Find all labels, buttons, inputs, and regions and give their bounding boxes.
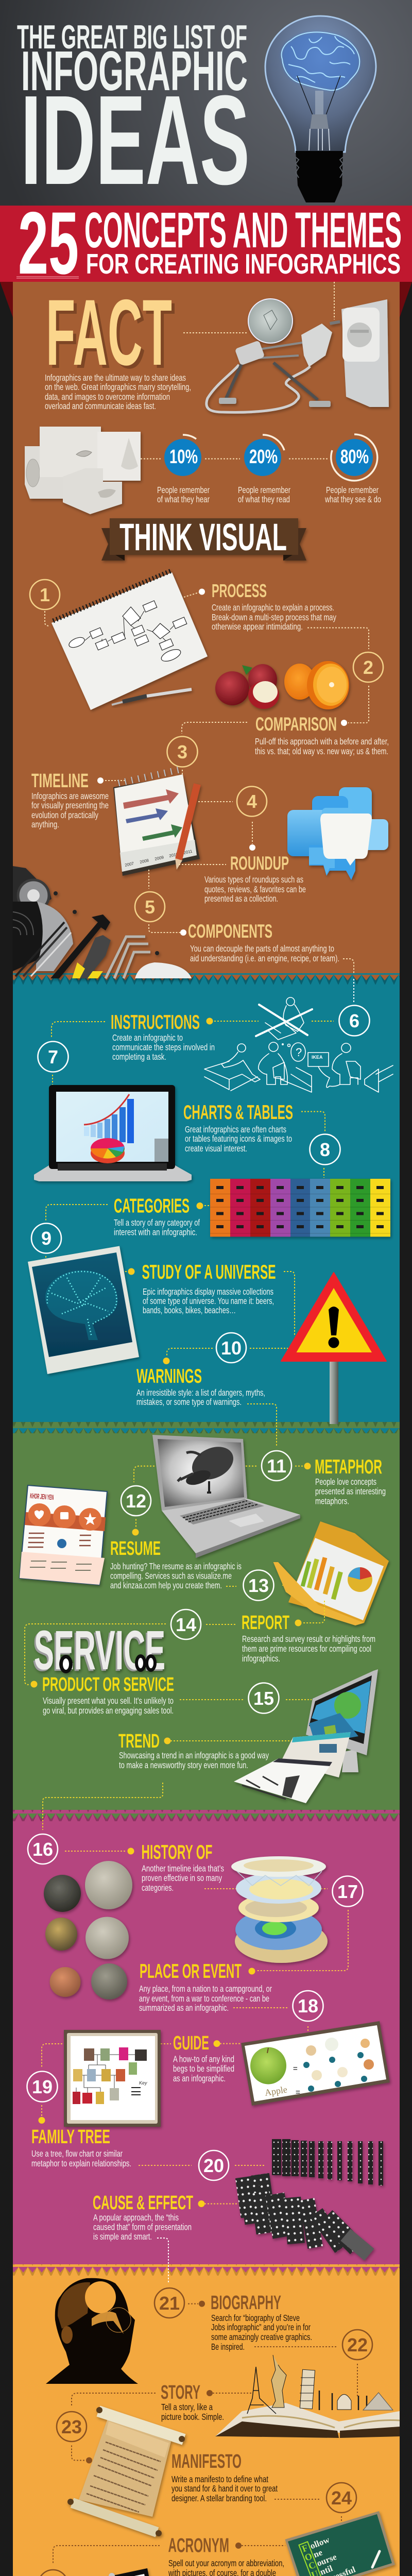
icon: laptop with elephant — [152, 1435, 300, 1558]
dot marker — [249, 844, 255, 851]
number 14 — [171, 1609, 201, 1639]
heading: warnings: WARNINGS — [136, 1365, 202, 1387]
captions: remember stats: of what they read — [238, 494, 290, 504]
number 21: 21 — [159, 2293, 180, 2314]
icon: falling dominoes — [235, 2139, 383, 2261]
number 23 — [57, 2412, 87, 2442]
icon: notebook with flowchart — [52, 571, 208, 710]
connector — [53, 2304, 357, 2576]
number 18 — [293, 1991, 323, 2021]
connector — [46, 1205, 210, 1260]
icon: exploded stadium — [231, 1856, 328, 1963]
text: trend: to make a newsworthy story even more fun. — [119, 1760, 248, 1770]
connector — [343, 959, 354, 973]
text: trend: Showcasing a trend in an infographic is a good way — [119, 1750, 269, 1760]
icon: chalkboard focus acronym: F — [300, 2543, 310, 2554]
number 23: 23 — [61, 2416, 82, 2437]
dot marker — [128, 1848, 134, 1855]
text: timeline: for visually presenting the — [31, 800, 109, 810]
captions: remember stats: People remember — [326, 485, 379, 495]
icon: manifesto scroll — [67, 2407, 185, 2536]
icon: timeline notepad and pencil: 2008 — [140, 858, 149, 865]
underline under 25 — [16, 277, 79, 278]
panel: red banner — [0, 194, 412, 317]
text: guide: as an infographic. — [173, 2073, 226, 2083]
text: instructions: communicate the steps involved in — [112, 1042, 215, 1052]
text: study of a universe — [143, 1286, 274, 1315]
icon: report folder with charts — [273, 1521, 389, 1625]
icon: pen — [112, 689, 192, 705]
connector — [52, 1021, 334, 1084]
dot marker — [164, 1737, 171, 1744]
heading: resume: RESUME — [110, 1538, 161, 1560]
number 6 — [339, 1006, 370, 1036]
text: components: You can decouple the parts of almost anything to — [190, 943, 334, 954]
banner: think visual: THINK VISUAL — [119, 516, 287, 558]
icon: coloured filing cabinets — [210, 1179, 390, 1236]
icon: 3D service truck — [34, 1619, 165, 1681]
panel: magenta section — [27, 1834, 390, 2282]
heading: components: COMPONENTS — [188, 921, 272, 942]
icon: clipboard checklist and red pen — [77, 2568, 167, 2576]
text: metaphor: metaphors. — [315, 1496, 349, 1506]
text: place or event — [139, 1984, 272, 2013]
number 22: 22 — [347, 2334, 368, 2355]
text: charts and tables — [185, 1124, 292, 1154]
text: instructions: completing a task. — [112, 1052, 166, 1062]
icon: timeline notepad and pencil: 2007 — [125, 861, 134, 868]
heading: fact: FACT — [46, 280, 172, 385]
number 2 — [353, 652, 383, 682]
number 9: 9 — [41, 1228, 52, 1249]
heading: history of: HISTORY OF — [141, 1841, 212, 1863]
icon: laptop with chart — [34, 1085, 192, 1181]
text: biography: Be inspired. — [211, 2342, 245, 2352]
text: warnings — [136, 1387, 265, 1407]
text: manifesto: Write a manifesto to define what — [171, 2474, 268, 2484]
text: history of: Another timeline idea that’s — [142, 1863, 224, 1873]
number 11: 11 — [267, 1455, 286, 1477]
dot marker — [198, 2200, 205, 2207]
text: charts and tables: create visual interest. — [185, 1143, 247, 1154]
connector — [157, 2238, 168, 2282]
text: fact paragraph: on the web. Great infographics marry storytelling, — [45, 382, 191, 392]
number 10 — [216, 1333, 246, 1363]
text: charts and tables: Great infographics are often charts — [185, 1124, 286, 1134]
text: cause and effect: A popular approach, the “this — [93, 2212, 179, 2223]
captions: remember stats: People remember — [238, 485, 290, 495]
number 7: 7 — [48, 1046, 58, 1067]
text: process — [212, 602, 336, 632]
connector — [353, 979, 354, 1003]
text: categories: interest with an infographic. — [114, 1227, 197, 1238]
text: process: Create an infographic to explain a process. — [212, 602, 334, 613]
text: instructions: Create an infographic to — [112, 1032, 183, 1043]
text: charts and tables: or tables featuring icons & images to — [185, 1133, 292, 1144]
text: story — [161, 2402, 224, 2422]
icon: resume document: KHOR JEN YEN — [30, 1492, 54, 1501]
title line: infographic: INFOGRAPHIC — [21, 40, 248, 103]
number 24 — [327, 2483, 356, 2513]
text: biography: Search for “biography of Steve — [211, 2313, 300, 2323]
text: metaphor: People love concepts — [315, 1477, 376, 1487]
icon: chalkboard focus acronym: C — [307, 2560, 317, 2571]
connector — [42, 1851, 348, 2204]
text: study of a universe: of some type of universe. You name it: beers, — [143, 1296, 274, 1306]
number 5 — [135, 892, 165, 922]
text: biography: Jobs infographic” and you’re in for — [211, 2322, 311, 2332]
text: biography — [211, 2313, 312, 2352]
icon: landmarks rising from open book — [215, 2355, 400, 2438]
text: components — [190, 943, 339, 963]
text: acronym — [168, 2558, 287, 2576]
dot marker — [163, 1358, 170, 1364]
panel: fact and think visual — [13, 280, 389, 978]
number 8 — [310, 1134, 340, 1164]
icon: face blocks — [25, 427, 141, 514]
heading: charts and tables: CHARTS & TABLES — [183, 1101, 293, 1124]
text: family tree: metaphor to explain relationships. — [31, 2158, 131, 2168]
icon: ikea assembly line drawing: ? — [296, 1046, 302, 1059]
icon: warning sign — [281, 1273, 386, 1424]
icon: family tree frame — [64, 2030, 161, 2127]
heading: manifesto: MANIFESTO — [171, 2451, 242, 2472]
dot marker — [180, 929, 186, 936]
text: manifesto: designer. A stellar branding tool. — [171, 2493, 267, 2503]
number 25 — [38, 2570, 68, 2576]
number 22 — [342, 2330, 372, 2360]
captions: remember stats: of what they hear — [157, 494, 210, 504]
text: process: Break-down a multi-step process that may — [212, 612, 336, 622]
heading: guide: GUIDE — [173, 2032, 209, 2054]
panel: teal section — [28, 979, 393, 1447]
number 24: 24 — [331, 2487, 352, 2509]
heading: instructions: INSTRUCTIONS — [111, 1011, 200, 1033]
text: warnings: mistakes, or some type of warnings. — [136, 1397, 242, 1407]
number 15 — [248, 1683, 279, 1714]
heading: study of a universe: STUDY OF A UNIVERSE — [142, 1261, 276, 1283]
text: categories — [114, 1217, 200, 1238]
text: timeline: Infographics are awesome — [31, 791, 109, 801]
text: guide: begs to be simplified — [173, 2063, 234, 2074]
text: timeline: evolution of practically — [31, 810, 98, 820]
heading: place or event: PLACE OR EVENT — [140, 1960, 242, 1982]
text: process: otherwise appear intimidating. — [212, 621, 303, 632]
stat: 20 percent: 20% — [249, 446, 278, 468]
text: biography: some amazingly creative graphics. — [211, 2332, 312, 2342]
dot marker — [97, 777, 104, 784]
text: place or event: any event, from a war to conference - can be — [139, 1993, 269, 2004]
text: roundup: quotes, reviews, & favorites can be — [204, 884, 306, 894]
heading: story: STORY — [161, 2382, 200, 2403]
icon: polaroid of circuit brain — [28, 1246, 139, 1374]
text: cause and effect: caused that” form of presentation — [93, 2222, 192, 2232]
connector — [125, 1272, 295, 1447]
text: history of: categories. — [142, 1883, 174, 1893]
text: metaphor — [315, 1477, 386, 1506]
icon: apple guide card: Apple — [264, 2084, 288, 2098]
stat: 80 percent: 80% — [340, 446, 369, 468]
connector — [149, 802, 252, 933]
captions: remember stats: People remember — [157, 485, 210, 495]
number 14: 14 — [176, 1614, 196, 1635]
text: history of: proven effective in so many — [142, 1873, 222, 1883]
icon: chalkboard focus acronym: ollow — [308, 2535, 331, 2551]
title line: ideas: IDEAS — [21, 69, 250, 211]
icon: resume document — [20, 1485, 107, 1585]
heading: cause and effect: CAUSE & EFFECT — [93, 2192, 193, 2214]
dot marker — [213, 2040, 220, 2047]
number 9 — [31, 1223, 61, 1253]
text: family tree: Use a tree, flow chart or similar — [31, 2148, 123, 2159]
number 2: 2 — [363, 657, 373, 678]
heading: report: REPORT — [242, 1612, 289, 1634]
dot marker — [206, 1018, 213, 1024]
dot marker — [38, 2117, 45, 2124]
number 19: 19 — [32, 2076, 53, 2097]
heading: roundup: ROUNDUP — [230, 853, 289, 874]
text: resume: Job hunting? The resume as an infographic is — [110, 1561, 242, 1571]
text: categories: Tell a story of any category of — [114, 1217, 200, 1228]
number 12 — [121, 1486, 151, 1516]
connector — [182, 686, 369, 734]
dot marker — [31, 1681, 37, 1688]
icon: family tree frame: Key — [139, 2080, 147, 2086]
text: story: picture book. Simple. — [161, 2412, 224, 2422]
text: components: aid understanding (i.e. an engine, recipe, or team). — [190, 953, 339, 963]
dot marker — [341, 720, 347, 726]
text: trend — [119, 1750, 269, 1770]
number 16: 16 — [32, 1839, 53, 1860]
number 17: 17 — [337, 1881, 358, 1902]
text: place or event: summarized as an infographic. — [139, 2003, 229, 2013]
text: history of — [142, 1863, 224, 1893]
icon: monitor and printed web pages — [234, 1669, 378, 1803]
number 4: 4 — [247, 791, 257, 812]
heading: categories: CATEGORIES — [114, 1195, 190, 1217]
number 10: 10 — [221, 1337, 242, 1359]
panel: orange section — [38, 2278, 400, 2576]
text: story: Tell a story, like a — [161, 2402, 213, 2412]
number 17 — [333, 1876, 363, 1906]
dot marker — [197, 1202, 203, 1209]
icon: timeline notepad and pencil: 2011 — [183, 849, 193, 855]
text: resume: compelling. Services such as visualize.me — [110, 1570, 232, 1581]
number 3 — [167, 737, 198, 767]
dot marker — [132, 1529, 139, 1535]
text: cause and effect — [93, 2212, 192, 2242]
number 12: 12 — [126, 1490, 146, 1512]
number 20 — [199, 2150, 229, 2180]
connector — [25, 1601, 324, 1830]
number 8: 8 — [320, 1139, 330, 1160]
text: study of a universe: bands, books, bikes, beaches… — [143, 1305, 236, 1315]
text: roundup: presented as a collection. — [204, 893, 278, 904]
text: acronym: Spell out your acronym or abbreviation, — [168, 2558, 284, 2568]
stat: 20 percent — [244, 435, 284, 476]
dot marker — [128, 1268, 135, 1275]
icon: tools and bike components — [13, 866, 192, 978]
icon: ikea assembly line drawing — [204, 997, 393, 1092]
text: timeline: anything. — [31, 819, 59, 829]
heading: trend: TREND — [118, 1731, 160, 1752]
number 4 — [237, 786, 267, 816]
number 1 — [30, 580, 60, 609]
text: instructions — [112, 1032, 215, 1062]
dot marker — [295, 1620, 302, 1626]
icon: timeline notepad and pencil — [113, 770, 200, 876]
dot marker — [86, 2458, 92, 2464]
text: fact paragraph: overload and communicate ideas fast. — [45, 401, 156, 411]
number 20: 20 — [203, 2155, 224, 2176]
big number 25: 25 — [18, 194, 79, 293]
panel: green section — [20, 1435, 389, 1830]
number 5: 5 — [145, 896, 155, 918]
number 15: 15 — [253, 1688, 274, 1709]
text: resume — [110, 1561, 242, 1590]
number 16 — [28, 1834, 58, 1864]
number 18: 18 — [298, 1995, 318, 2016]
text: product or service — [43, 1696, 174, 1716]
icon: light bulb with glowing brain — [265, 16, 376, 202]
heading: timeline: TIMELINE — [31, 770, 89, 792]
icon: chalkboard focus acronym: ourse — [315, 2552, 338, 2568]
captions: remember stats — [157, 485, 381, 504]
icon: timeline notepad and pencil: 2010 — [169, 852, 179, 858]
text: manifesto — [171, 2474, 278, 2503]
captions: remember stats: what they see & do — [324, 494, 381, 504]
text: fact paragraph: Infographics are the ultimate way to share ideas — [45, 372, 186, 383]
connector — [134, 1466, 303, 1586]
heading: biography: BIOGRAPHY — [211, 2292, 281, 2314]
text: guide — [173, 2054, 234, 2083]
heading: process: PROCESS — [212, 580, 267, 601]
title line: the great big list of: THE GREAT BIG LIST OF — [17, 18, 247, 56]
dot marker — [207, 2390, 213, 2396]
dot marker — [304, 1463, 311, 1469]
text: product or service: go viral, but provides an engaging sales tool. — [43, 1705, 174, 1716]
number 21 — [154, 2288, 184, 2318]
icon: apple guide card: = — [293, 2064, 298, 2073]
number 13 — [243, 1570, 274, 1600]
text: place or event: Any place, from a nation to a campground, or — [139, 1984, 272, 1994]
number 6: 6 — [349, 1010, 359, 1031]
heading: family tree: FAMILY TREE — [31, 2126, 110, 2148]
panel: header — [0, 0, 412, 211]
text: manifesto: you stand for & hand it over to great — [171, 2483, 278, 2494]
icon: 3D service truck: SERVICE — [34, 1619, 165, 1681]
connector — [45, 592, 369, 649]
dot marker — [199, 588, 205, 595]
connector — [141, 459, 329, 460]
icon: speech bubbles — [287, 787, 388, 880]
dot marker — [235, 2543, 242, 2549]
number 3: 3 — [177, 741, 187, 762]
text: cause and effect: is simple and smart. — [93, 2231, 152, 2242]
heading: product or service: PRODUCT OR SERVICE — [42, 1674, 174, 1696]
text: roundup — [204, 874, 306, 904]
stat: 80 percent — [331, 434, 377, 481]
text: report: infographics. — [242, 1653, 280, 1664]
text: guide: A how-to of any kind — [173, 2054, 234, 2064]
heading: comparison: COMPARISON — [255, 714, 337, 735]
stat: 10 percent — [164, 435, 201, 476]
text: warnings: An irresistible style: a list of dangers, myths, — [136, 1387, 265, 1398]
text: timeline — [31, 791, 109, 829]
icon: steve jobs silhouette — [46, 2278, 138, 2384]
text: report — [242, 1634, 375, 1664]
icon: timeline notepad and pencil: 2009 — [154, 855, 164, 861]
number 1: 1 — [40, 584, 50, 605]
connector — [301, 1112, 325, 1178]
dot marker — [199, 2301, 205, 2307]
heading: acronym: ACRONYM — [168, 2535, 229, 2557]
icon: apple guide card: = — [296, 2088, 300, 2097]
icon: apple guide card — [241, 2021, 390, 2106]
connector — [105, 770, 182, 781]
icon: chalkboard focus acronym: ne — [312, 2547, 324, 2560]
icon: apples and oranges — [215, 661, 349, 709]
text: comparison — [255, 736, 389, 756]
number 13: 13 — [248, 1575, 269, 1596]
text: study of a universe: Epic infographics display massive collections — [143, 1286, 273, 1297]
icon: chalkboard focus acronym: O — [303, 2551, 314, 2563]
banner: think visual — [101, 516, 306, 561]
text: product or service: Visually present what you sell. It’s unlikely to — [43, 1696, 174, 1706]
icon: coins — [44, 1861, 132, 1999]
number 7 — [38, 1042, 68, 1072]
number 19 — [27, 2071, 58, 2102]
text: family tree — [31, 2148, 131, 2168]
text: roundup: Various types of roundups such as — [204, 874, 303, 885]
icon: light bulb robot plugging in — [207, 299, 389, 412]
icon: chalkboard focus acronym — [285, 2511, 395, 2576]
dot marker — [248, 1968, 255, 1974]
connector — [183, 282, 334, 333]
text: fact paragraph — [45, 372, 191, 411]
stat: 10 percent: 10% — [169, 446, 198, 468]
text: metaphor: presented as interesting — [315, 1486, 386, 1497]
text: resume: and kinzaa.com help you create them. — [110, 1580, 222, 1590]
number 11 — [262, 1451, 291, 1481]
icon: ikea assembly line drawing: IKEA — [312, 1055, 323, 1060]
text: fact paragraph: data, and images to overcome information — [45, 392, 170, 402]
